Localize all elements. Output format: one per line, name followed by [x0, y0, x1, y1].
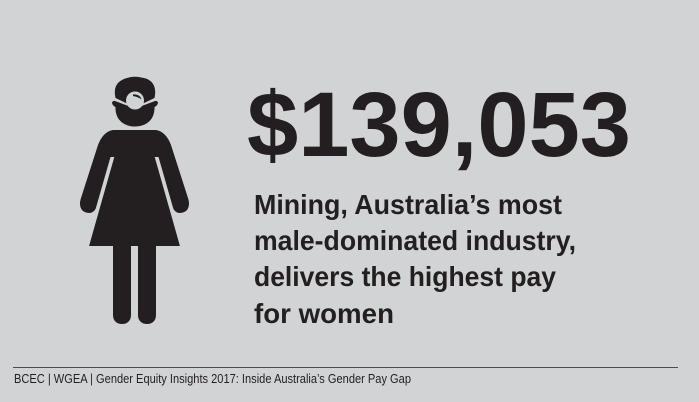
- text block: description: Mining, Australia’s most: [254, 189, 562, 220]
- headlamp: [126, 92, 144, 110]
- footer source line: BCEC | WGEA | Gender Equity Insights 2017: Inside Australia’s Gender Pay Gap: [14, 372, 411, 386]
- arm gaps: [85, 157, 114, 246]
- strap and lower face: [112, 101, 158, 126]
- text block: description: for women: [254, 298, 394, 329]
- body, arms and legs: [80, 130, 189, 324]
- text block: description: [254, 189, 576, 329]
- helmet: [115, 77, 155, 104]
- text block: description: male-dominated industry,: [254, 225, 576, 256]
- icon: woman miner with headlamp: [80, 77, 189, 324]
- big figure: pay amount: $139,053: [247, 74, 631, 176]
- text block: description: delivers the highest pay: [254, 261, 556, 292]
